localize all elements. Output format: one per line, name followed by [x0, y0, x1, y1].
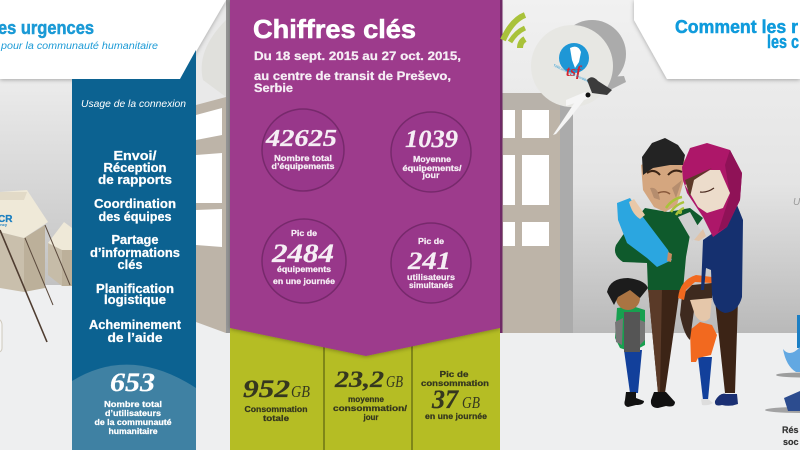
stat: 653 users: humanitaire: [108, 427, 158, 436]
stat: consommation totale: [243, 376, 311, 423]
stat: 653 users: 653: [110, 368, 155, 397]
stat: consommation totale: 952: [243, 376, 290, 403]
stat: consommation totale: Consommation: [244, 404, 308, 414]
usage: planification: Planification: [96, 282, 174, 296]
illustration: family: [607, 138, 743, 408]
circle: moyenne équipements: jour: [421, 171, 440, 180]
caption: soc: [783, 437, 799, 447]
caption: Rés: [782, 425, 799, 435]
panel: title banner right: [634, 0, 800, 79]
circle: nombre total équipements: [262, 109, 344, 191]
panel: chiffres clés: [230, 0, 502, 450]
usage: partage: clés: [118, 258, 143, 272]
circle: moyenne équipements: 1039: [405, 126, 459, 153]
icon: satellite dish with TSF logo: tsf: [566, 64, 583, 80]
circle: pic utilisateurs: [391, 223, 471, 303]
usage: coordination: Coordination: [94, 197, 176, 211]
panel: title banner left: [0, 0, 226, 79]
usage: partage: [90, 233, 180, 272]
usage: rapports: Réception: [104, 161, 166, 175]
date and location: [254, 51, 461, 95]
stat: moyenne par jour: 23,2: [334, 367, 384, 392]
usage: planification: logistique: [104, 293, 166, 307]
icon: satellite dish with TSF logo: Télécoms Sans Frontières: [553, 63, 592, 84]
panel heading: Usage de la connexion: [81, 98, 186, 110]
panel: usage de la connexion: [72, 50, 196, 450]
baby: [617, 198, 672, 267]
stat: 653 users: d’utilisateurs: [105, 409, 162, 418]
stat: moyenne par jour: GB: [386, 372, 403, 391]
stat: moyenne par jour: moyenne: [348, 394, 384, 404]
circle: nombre total équipements: d’équipements: [272, 162, 335, 171]
stat: moyenne par jour: jour: [363, 412, 379, 422]
circle: pic équipements: [262, 219, 346, 303]
subheading: pour la communauté humanitaire: [0, 41, 158, 52]
circle: pic équipements: en une journée: [273, 277, 336, 286]
stat: consommation totale: GB: [291, 382, 311, 401]
building right of the purple panel: [500, 93, 573, 333]
usage: coordination: des équipes: [98, 210, 172, 224]
stat: moyenne par jour: [333, 367, 408, 422]
circle: moyenne équipements: équipements/: [402, 164, 462, 173]
tents illustration: [0, 190, 72, 352]
circle: pic équipements: Pic de: [291, 229, 318, 238]
usage: planification: [96, 282, 174, 307]
stat: pic de consommation: 37: [431, 385, 459, 414]
circle: nombre total équipements: 42625: [265, 126, 337, 152]
stat: pic de consommation: GB: [462, 393, 480, 412]
heading: urgences: es urgences: [0, 18, 94, 38]
stat: 653 users: [72, 365, 196, 450]
stat: pic de consommation: Pic de: [440, 369, 469, 379]
usage: acheminement: [89, 318, 182, 345]
usage: rapports: [98, 149, 172, 187]
usage: acheminement: de l’aide: [108, 331, 163, 345]
heading: [675, 16, 799, 52]
icon: social network graphics: [765, 315, 800, 447]
building left of the purple panel: [196, 0, 230, 333]
stat: consommation totale: totale: [263, 413, 289, 423]
usage: partage: d’informations: [90, 246, 180, 260]
usage: rapports: de rapports: [98, 173, 172, 187]
man: [615, 138, 703, 408]
stat: pic de consommation: en une journée: [425, 411, 487, 421]
icon: satellite dish with TSF logo: [531, 20, 626, 135]
stat: pic de consommation: [421, 369, 489, 421]
circle: pic équipements: 2484: [271, 239, 334, 268]
date and location: au centre de transit de Preševo,: [254, 71, 451, 83]
circle: nombre total équipements: Nombre total: [274, 154, 332, 163]
circle: moyenne équipements: Moyenne: [413, 155, 452, 164]
caption: [782, 425, 799, 447]
date and location: Du 18 sept. 2015 au 27 oct. 2015,: [254, 51, 461, 63]
circle: pic utilisateurs: 241: [407, 248, 451, 275]
icon: wifi on phone: [666, 197, 684, 215]
stat: 653 users: Nombre total: [104, 400, 162, 409]
heading: Comment les r: [675, 16, 798, 37]
circle: pic utilisateurs: Pic de: [418, 237, 445, 246]
stat: moyenne par jour: consommation/: [333, 403, 408, 413]
stat: 653 users: de la communauté: [94, 418, 172, 427]
woman: [678, 143, 743, 406]
usage: rapports: Envoi/: [114, 149, 157, 163]
heading: Chiffres clés: [253, 14, 416, 44]
stat: pic de consommation: consommation: [421, 378, 489, 388]
circle: moyenne équipements: [391, 112, 471, 192]
usage: partage: Partage: [112, 233, 159, 247]
girl: [678, 275, 717, 405]
usage: coordination: [94, 197, 176, 224]
circle: pic équipements: équipements: [277, 265, 332, 274]
green consumption band: [230, 320, 500, 450]
circle: pic utilisateurs: utilisateurs: [407, 273, 456, 282]
boy: [607, 278, 648, 407]
usage: acheminement: Acheminement: [89, 318, 182, 332]
icon: wifi signal: [503, 15, 525, 48]
date and location: Serbie: [254, 83, 293, 95]
circle: pic utilisateurs: simultanés: [409, 281, 454, 290]
